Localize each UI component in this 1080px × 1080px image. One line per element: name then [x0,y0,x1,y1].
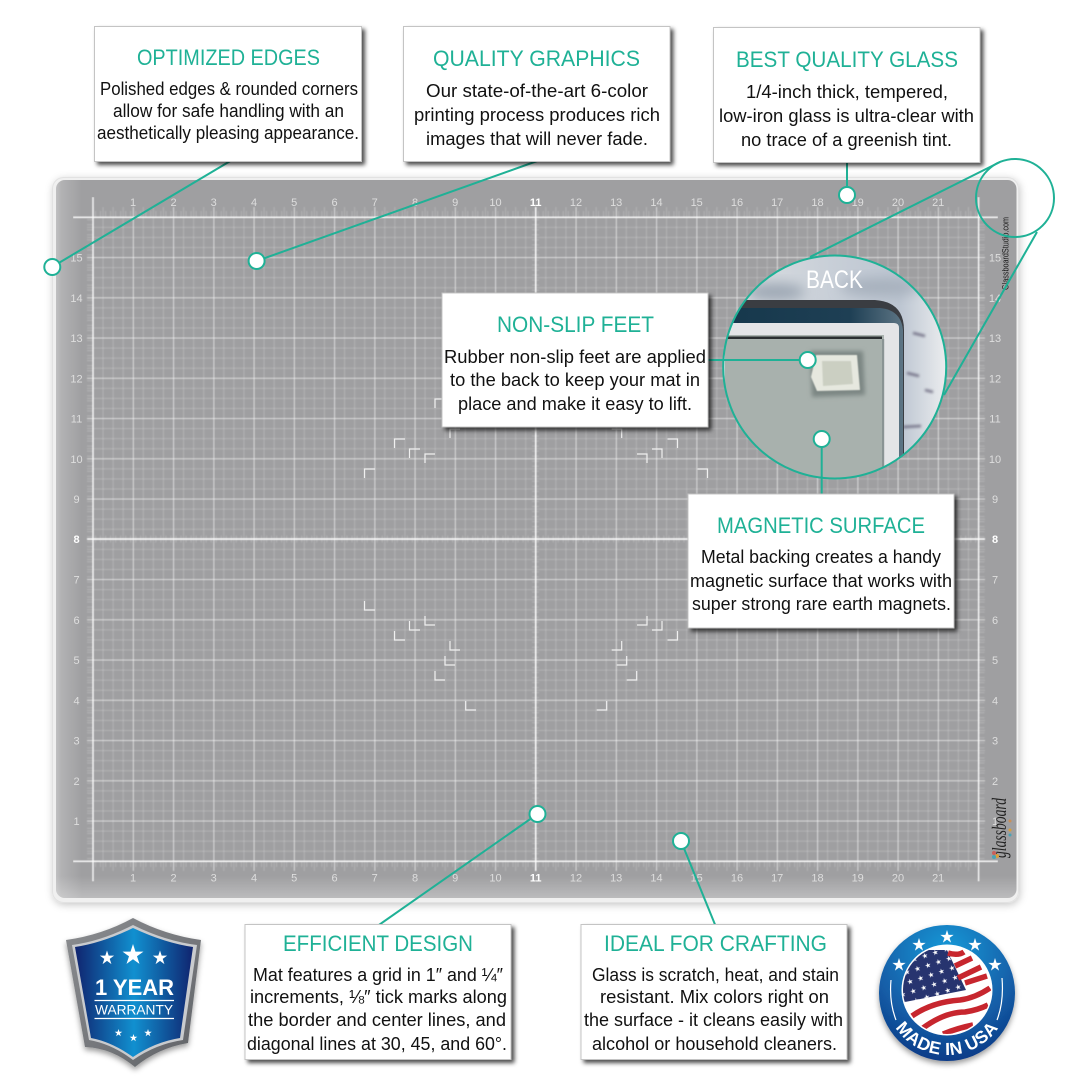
top inch scale: 20 [892,197,904,209]
body text [414,80,660,149]
top inch scale: 8 [412,197,418,209]
bottom inch scale: 20 [892,872,904,884]
right inch scale: 6 [992,615,998,627]
panel: best quality glass [714,28,980,162]
website text: GlassboardStudio.com [1000,217,1010,290]
right inch scale: 8 [992,534,998,546]
leader: ideal for crafting [673,833,716,927]
right inch scale: 1 [992,816,998,828]
panel: magnetic surface [688,494,954,628]
warranty text: 1 YEAR [95,975,174,1000]
top inch scale: 1 [130,197,136,209]
badge text: MADE IN USA [896,1020,998,1055]
body text: allow for safe handling with an [113,100,344,121]
top inch scale: 19 [852,197,864,209]
bottom inch scale: 7 [372,872,378,884]
body text: no trace of a greenish tint. [741,129,952,150]
top inch scale: 11 [530,197,542,209]
left inch scale: 11 [71,414,82,426]
top inch scale: 7 [372,197,378,209]
right inch scale: 3 [992,736,998,748]
top inch scale [130,197,944,209]
left inch scale: 4 [73,695,80,707]
left inch scale: 1 [73,816,80,828]
body text: Metal backing creates a handy [701,546,942,567]
right inch scale: 7 [992,574,998,586]
photo: back of the mat [720,250,950,485]
panel: quality graphics [404,26,670,162]
grid lines [73,197,998,882]
top inch scale: 2 [170,197,177,209]
body text: 1/4-inch thick, tempered, [746,81,948,102]
body text [584,964,843,1054]
panel: efficient design [245,924,511,1060]
body text: images that will never fade. [426,128,648,149]
body text: Polished edges & rounded corners [100,78,358,99]
body text: the surface - it cleans easily with [584,1009,843,1030]
leader: best quality glass [839,160,855,203]
bottom inch scale: 16 [731,872,743,884]
leader: quality graphics [249,160,540,269]
left inch scale: 9 [73,494,80,506]
diagonal alignment marks [364,399,708,710]
bottom inch scale: 21 [932,872,944,884]
glass cutting mat [52,178,1018,902]
leader lines from magnifier to photo [810,162,1037,395]
bottom inch scale: 6 [331,872,338,884]
right inch scale: 11 [989,414,1001,426]
panel: non-slip feet [442,293,708,427]
top inch scale: 4 [251,197,257,209]
top inch scale: 13 [610,197,622,209]
top inch scale: 18 [811,197,824,209]
body text [444,346,706,414]
body text: magnetic surface that works with [690,570,952,591]
body text: alcohol or household cleaners. [592,1033,837,1054]
left inch scale: 10 [70,454,83,466]
body text [247,964,507,1054]
right inch scale [989,252,1001,828]
left inch scale: 12 [70,373,83,385]
heading: IDEAL FOR CRAFTING [604,931,827,956]
bottom inch scale: 13 [610,872,622,884]
heading: BEST QUALITY GLASS [736,47,958,72]
left inch scale: 13 [70,333,83,345]
panel: optimized edges [94,26,362,162]
top inch scale: 5 [291,197,297,209]
top inch scale: 12 [570,197,582,209]
body text: Glass is scratch, heat, and stain [592,964,839,985]
top inch scale: 15 [691,197,703,209]
body text: resistant. Mix colors right on [600,986,829,1007]
right inch scale: 4 [992,695,998,707]
leader: non-slip feet [700,352,816,368]
body text: aesthetically pleasing appearance. [97,122,359,143]
right inch scale: 10 [989,454,1001,466]
top inch scale: 14 [650,197,663,209]
bottom inch scale: 5 [291,872,297,884]
right inch scale: 12 [989,373,1001,385]
bottom inch scale: 15 [691,872,703,884]
bottom inch scale: 4 [251,872,257,884]
body text [690,546,952,614]
body text: Our state-of-the-art 6-color [426,80,648,101]
glassboard logo: glassboard [989,797,1011,858]
left inch scale: 7 [73,574,80,586]
heading: QUALITY GRAPHICS [433,46,640,71]
body text: increments, ⅛″ tick marks along [250,986,507,1007]
left inch scale: 2 [73,776,80,788]
bottom inch scale: 12 [570,872,582,884]
right inch scale: 5 [992,655,998,667]
body text: diagonal lines at 30, 45, and 60°. [247,1033,507,1054]
bottom inch scale: 2 [170,872,177,884]
bottom inch scale: 11 [530,872,542,884]
bottom inch scale: 1 [130,872,136,884]
body text: Mat features a grid in 1″ and ¼″ [253,964,503,985]
left inch scale: 8 [73,534,80,546]
heading: NON-SLIP FEET [497,312,654,337]
left inch scale: 5 [73,655,80,667]
body text: the border and center lines, and [248,1009,506,1030]
top inch scale: 6 [331,197,338,209]
glassboard logo [989,797,1012,859]
right inch scale: 9 [992,494,998,506]
right inch scale: 14 [989,293,1001,305]
body text [719,81,974,150]
top inch scale: 17 [771,197,783,209]
heading: OPTIMIZED EDGES [137,45,320,70]
leader: optimized edges [44,160,232,275]
body text: super strong rare earth magnets. [692,593,951,614]
bottom inch scale: 19 [852,872,864,884]
icon: warranty shield [66,918,201,1067]
bottom inch scale [130,872,944,884]
leader: magnetic surface [814,431,830,500]
heading: MAGNETIC SURFACE [717,513,925,538]
left inch scale: 14 [70,293,83,305]
body text: printing process produces rich [414,104,660,125]
left inch scale [70,252,83,828]
bottom inch scale: 17 [771,872,783,884]
bottom inch scale: 14 [650,872,663,884]
magnifier circle on mat corner [976,159,1054,237]
left inch scale: 6 [73,615,80,627]
top inch scale: 9 [452,197,458,209]
top inch scale: 10 [489,197,502,209]
icon: warranty shield: WARRANTY [95,1002,173,1018]
heading: EFFICIENT DESIGN [283,931,473,956]
bottom inch scale: 3 [211,872,217,884]
leader: efficient design [376,806,546,927]
body text: to the back to keep your mat in [450,369,700,390]
right inch scale: 15 [989,252,1001,264]
top inch scale: 16 [731,197,743,209]
body text: Rubber non-slip feet are applied [444,346,706,367]
bottom inch scale: 10 [489,872,502,884]
bottom inch scale: 9 [452,872,458,884]
bottom inch scale: 8 [412,872,418,884]
bottom inch scale: 18 [811,872,824,884]
right inch scale: 2 [992,776,998,788]
body text: low-iron glass is ultra-clear with [719,105,974,126]
top inch scale: 21 [932,197,944,209]
body text: place and make it easy to lift. [458,393,692,414]
body text [97,78,359,143]
panel: ideal for crafting [581,924,847,1060]
top inch scale: 3 [211,197,217,209]
right inch scale: 13 [989,333,1001,345]
photo caption: BACK [806,266,863,294]
left inch scale: 3 [73,736,80,748]
left inch scale: 15 [70,252,83,264]
icon: made in USA badge [875,924,1019,1068]
